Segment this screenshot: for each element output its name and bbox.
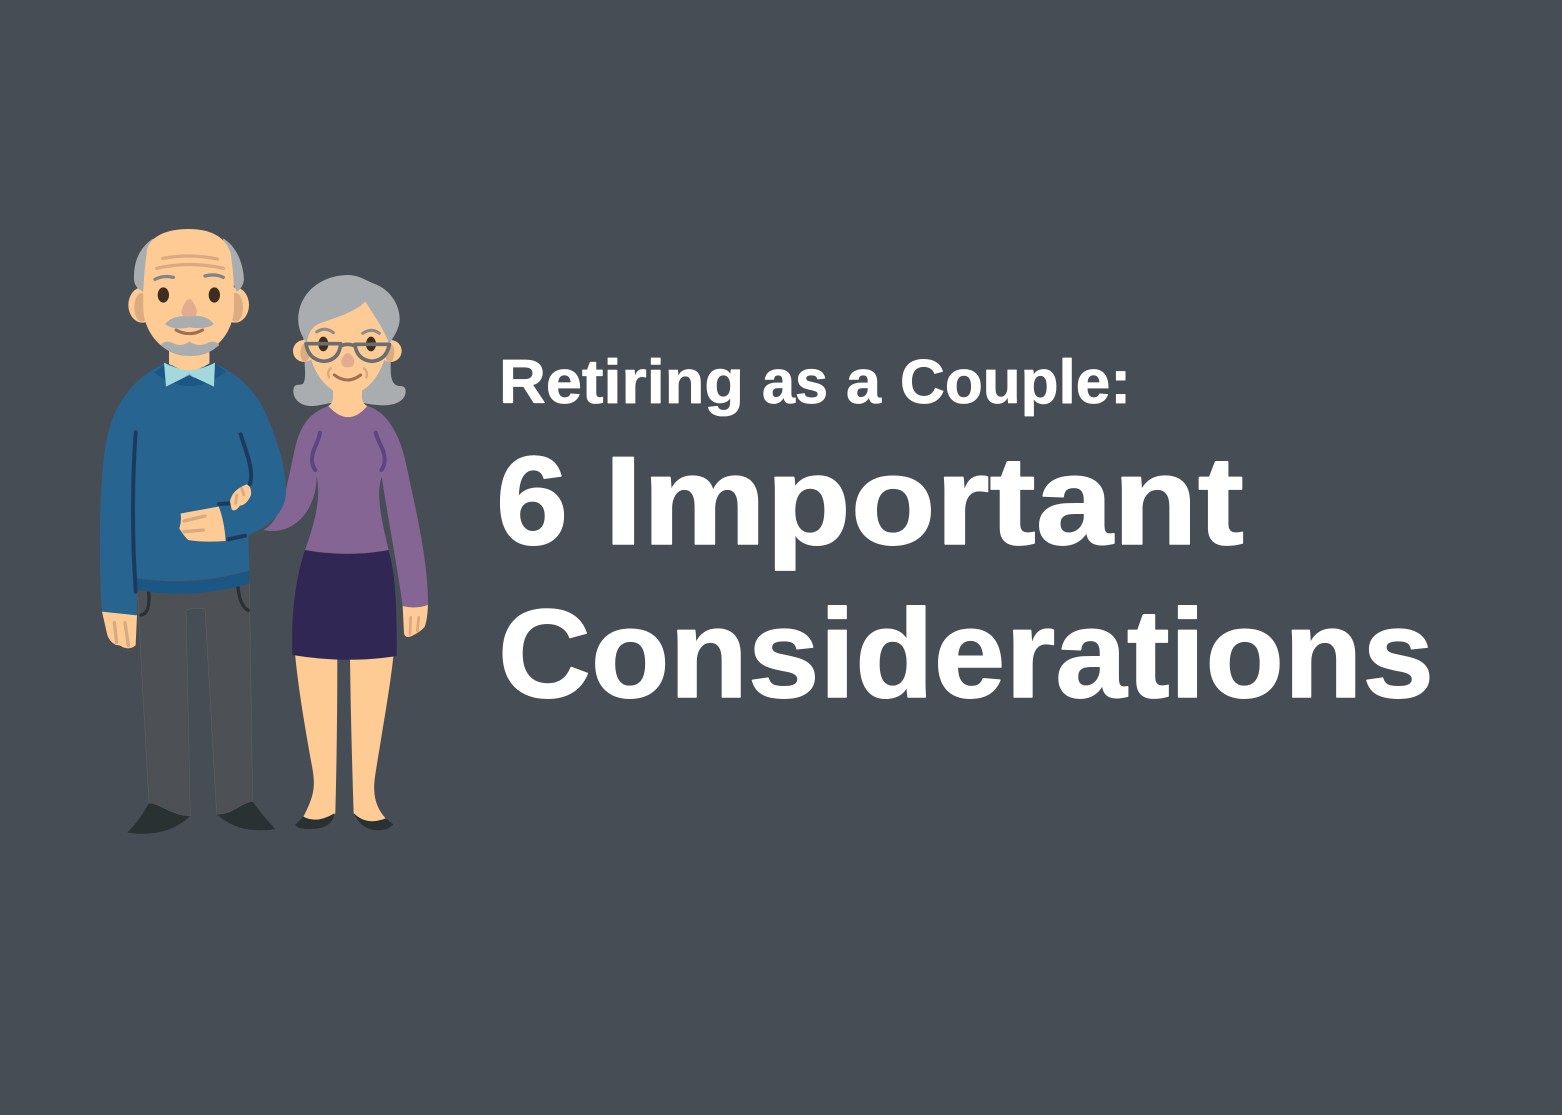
man sweater neckline — [154, 363, 226, 386]
title text block — [496, 348, 1434, 724]
man right hand — [180, 507, 225, 541]
man neck — [169, 347, 209, 371]
woman glasses — [306, 344, 389, 361]
man beard — [161, 342, 219, 356]
subtitle line: Retiring — [499, 348, 744, 417]
man sweater hem — [137, 571, 249, 594]
man forehead wrinkles — [157, 256, 223, 268]
woman eyes — [318, 337, 376, 351]
woman ears — [293, 340, 402, 362]
woman sweater — [263, 406, 428, 607]
man neck front — [169, 353, 209, 370]
woman face — [307, 295, 389, 395]
man nose — [182, 299, 197, 318]
man side hair — [134, 238, 244, 292]
woman sweater contour lines — [312, 433, 385, 470]
woman shoes — [295, 813, 393, 830]
man pants — [137, 580, 253, 816]
woman legs — [295, 653, 394, 822]
man moustache — [165, 316, 214, 328]
woman back hair — [293, 333, 406, 406]
woman eyebrows — [317, 329, 379, 333]
man sweater contour lines — [133, 432, 251, 592]
man eyes — [158, 287, 220, 303]
man smile — [176, 330, 203, 334]
illustration: elderly couple — [100, 229, 428, 834]
pocket lines — [141, 587, 248, 615]
woman neck — [327, 383, 368, 420]
main heading line one: 6 — [496, 430, 568, 571]
subtitle line: a — [846, 348, 882, 417]
man head — [143, 229, 234, 356]
woman figure — [263, 275, 428, 830]
man eyebrows — [155, 275, 223, 279]
subtitle line: as — [762, 348, 828, 417]
woman nose — [341, 353, 354, 367]
main heading line two: Considerations — [498, 583, 1434, 724]
woman right hand — [403, 605, 427, 636]
man left hand — [103, 612, 136, 648]
woman front hair — [298, 275, 400, 344]
woman face details — [306, 329, 389, 380]
woman wrinkles — [328, 368, 367, 377]
man ears — [128, 287, 249, 323]
woman hand on arm — [230, 484, 251, 510]
man sweater — [100, 363, 286, 615]
subtitle line: Couple: — [900, 348, 1131, 417]
man shoes — [127, 802, 275, 834]
woman skirt — [292, 550, 397, 660]
woman smile — [334, 375, 361, 380]
man figure — [100, 229, 286, 834]
main heading line one: Important — [604, 430, 1244, 571]
man shirt collar — [164, 363, 215, 387]
